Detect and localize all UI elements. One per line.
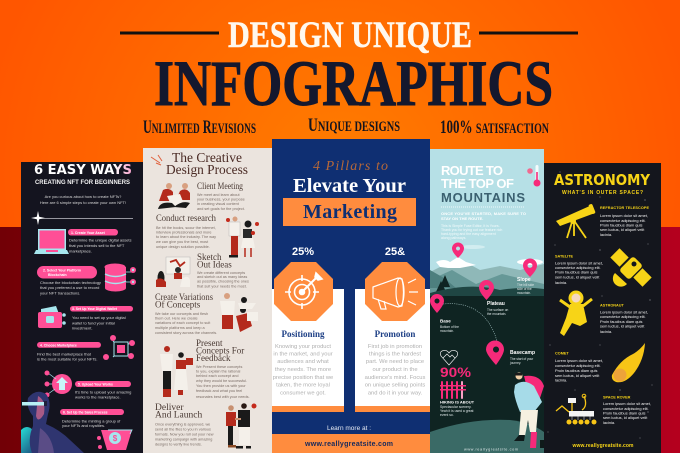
item: comet: sem luctus, id aliquet velit	[555, 373, 600, 378]
subheading and text: ONCE YOU'VE STARTED, MAKE SURE TO	[441, 211, 526, 216]
subheading and text	[441, 207, 526, 240]
step 3: wallet to fund your initial	[72, 320, 115, 326]
icon: telescope	[556, 204, 596, 238]
step 2: that you preferred a use to record	[40, 285, 99, 290]
icon: space rover	[556, 394, 596, 424]
step 6: your NFTs and royalties.	[62, 423, 105, 428]
step: client meeting: and set goals for the project.	[197, 207, 245, 211]
icon: network cube	[103, 335, 135, 360]
intro text	[40, 194, 126, 205]
step: create variations: Of Concepts	[155, 300, 201, 310]
icon: satellite	[610, 248, 652, 287]
item: comet	[555, 352, 603, 382]
decorative stars	[548, 172, 652, 438]
card: promotion: part. We need to place	[366, 359, 424, 365]
item: astronaut: sem luctus, id aliquet velit	[600, 324, 645, 328]
item: astronaut: Proin faucibus diam quis	[600, 319, 642, 324]
icon: astronaut	[560, 290, 592, 336]
icon: laptop	[34, 229, 69, 254]
step 4	[37, 342, 101, 362]
item: astronaut: consectetur adipiscing elit.	[600, 314, 646, 319]
step 3: You need to set up your digital	[72, 315, 126, 320]
card: positioning: in the market, and your	[273, 352, 333, 358]
illustration: two people meeting	[158, 183, 190, 209]
card: promotion	[355, 246, 430, 412]
subheading and text: Thank you for trying out our feature rich	[441, 228, 502, 232]
step: create variations	[155, 292, 217, 335]
heading: astronomy: ASTRONOMY	[554, 171, 651, 189]
card: positioning: Positioning	[281, 329, 325, 339]
icon: heart mountain	[440, 350, 458, 365]
pin: slope	[523, 258, 537, 277]
item: comet: Lorem ipsum dolor sit amet,	[555, 358, 603, 363]
step 1: 1. Create Your Asset	[71, 231, 106, 235]
label: slope: Slope	[517, 277, 531, 283]
footer website: www.reallygreatsite.com	[464, 448, 518, 452]
step: deliver and launch: send all the files to you in various	[155, 428, 211, 432]
step: deliver and launch: formats. Now you roll out your new	[155, 432, 214, 436]
item: space rover: sem luctus, id aliquet velit	[603, 415, 648, 420]
heading: Elevate Your: Elevate Your	[293, 175, 406, 197]
pin: base	[430, 294, 444, 313]
label: slope: The hill side	[517, 283, 534, 287]
item: comet: consectetur adipiscing elit.	[555, 363, 601, 368]
heading: route to the top of mountains	[441, 163, 525, 205]
step: sketch out ideas: and sketch out as many ideas	[197, 275, 247, 279]
text: hiking is about: event so.	[440, 413, 454, 417]
card: promotion: our product in the	[372, 367, 418, 373]
label: plateau: The surface on	[487, 308, 508, 312]
stat: 90 percent: 90%	[440, 365, 471, 380]
step: create variations: Create Variations	[155, 292, 213, 302]
step: client meeting: in creating visual content	[197, 202, 240, 206]
step: client meeting: We meet and learn about	[197, 193, 241, 197]
step 2: 2. Select Your Platform	[43, 268, 81, 272]
panel title	[166, 151, 248, 178]
background: orange upper band	[0, 0, 680, 227]
step: present concepts: to you, explain the rational	[196, 370, 240, 374]
label: slope: side of the	[517, 287, 532, 291]
item: satelite: SATELITE	[555, 254, 574, 258]
step 2: your NFT transactions.	[40, 290, 80, 296]
label: plateau: Plateau	[487, 301, 505, 307]
card: promotion: and do it in your way.	[368, 390, 423, 396]
item: satelite: lacinia.	[555, 280, 567, 285]
step 6: 6. Set Up the Sales Process	[63, 410, 108, 414]
item: satelite: sem luctus, id aliquet velit	[555, 274, 600, 280]
item: space rover	[603, 396, 651, 425]
step: present concepts	[196, 338, 250, 399]
illustration: two people presenting	[160, 346, 193, 397]
item: refractor telescope: REFRACTOR TELESCOPE	[600, 206, 649, 210]
item: space rover: Proin faucibus diam quis	[603, 410, 645, 416]
card: positioning: they needs. The more	[275, 367, 331, 373]
icon: thermometer	[527, 165, 540, 186]
item: space rover: Lorem ipsum dolor sit amet,	[603, 401, 651, 406]
footer: website bar: www.reallygreatsite.com	[304, 441, 393, 448]
card: promotion: audience's mind. Focus	[365, 375, 425, 381]
dark lower field	[430, 296, 544, 453]
card: positioning: precise position that we	[273, 375, 333, 381]
step: sketch out ideas	[197, 252, 249, 288]
item: refractor telescope: consectetur adipiscing elit.	[600, 218, 646, 223]
footer website: www.reallygreatsite.com	[572, 443, 634, 449]
pin: summit	[452, 242, 464, 258]
icon: megaphone	[373, 278, 418, 309]
step: conduct research: we can give you the best, most	[156, 240, 209, 244]
background: dark red lower band	[0, 227, 680, 453]
step 1	[68, 229, 131, 254]
item: satelite	[555, 254, 603, 285]
step: create variations: them out. Here we create	[155, 316, 198, 320]
item: refractor telescope: Proin faucibus diam quis	[600, 222, 642, 228]
pin: plateau	[479, 280, 494, 300]
illustration: hiker	[514, 372, 544, 448]
subheading and text: along pathways.	[441, 236, 466, 240]
step 3: investment.	[72, 326, 92, 330]
item: astronaut	[600, 304, 648, 334]
intro text: Here are 6 simple steps to create your own NFT!	[40, 200, 126, 205]
item: comet: COMET	[555, 352, 569, 356]
step: conduct research: interview professionals and more	[156, 230, 212, 234]
step 1: that you intends sell to the NFT	[69, 243, 125, 248]
card: promotion: things is the hardest	[369, 352, 421, 358]
step: conduct research: Be hit the books, scour the internet,	[156, 226, 216, 230]
item: astronaut: Lorem ipsum dolor sit amet,	[600, 310, 648, 314]
step: deliver and launch: Deliver	[155, 403, 184, 413]
heading: route to the top of mountains: MOUNTAINS	[441, 190, 525, 205]
label: basecamp: journey.	[509, 361, 521, 365]
banner: Marketing: Marketing	[303, 201, 397, 223]
step 6	[60, 409, 124, 428]
icon: money screen	[97, 430, 132, 450]
step 3	[70, 306, 133, 330]
step 5: It's time to upload your amazing	[75, 390, 131, 394]
text: hiking is about: Spectacular scenery.	[440, 405, 471, 409]
item: satelite: Proin faucibus diam quis	[555, 270, 597, 274]
card: positioning	[272, 246, 344, 412]
item: refractor telescope: sem luctus, id aliquet velit	[600, 227, 645, 232]
item: comet: Proin faucibus diam quis	[555, 368, 597, 373]
ground hill	[430, 420, 544, 453]
footer: website bar	[272, 434, 430, 453]
item: refractor telescope	[600, 206, 649, 237]
step 3: 3. Set Up Your Digital Wallet	[72, 307, 118, 311]
label: basecamp	[509, 350, 535, 365]
panel: creative design process	[143, 148, 272, 453]
step: deliver and launch: designs to verify live trends.	[155, 442, 202, 446]
step: present concepts: We Present these concepts	[196, 365, 242, 369]
card: promotion: First job in promotion	[368, 344, 422, 350]
panel title: Design Process	[166, 163, 248, 178]
card: promotion: 25&	[385, 246, 405, 258]
step 5: 5. Upload Your Works	[78, 382, 113, 386]
step: present concepts: Feedback	[196, 353, 231, 363]
panel: 6 easy ways NFT	[21, 162, 145, 453]
item: space rover: lacinia.	[603, 420, 615, 425]
step: deliver and launch: marketing campaign with amazing	[155, 438, 212, 442]
item: space rover: SPACE ROVER	[603, 396, 631, 400]
step: create variations: We take our concepts and flesh	[155, 312, 208, 316]
step: deliver and launch: And Launch	[155, 410, 202, 420]
footer: learn more: Learn more at :	[327, 425, 371, 432]
panel: four pillars marketing	[272, 139, 430, 453]
step 5	[75, 381, 131, 400]
step: client meeting: your business, your purpose	[197, 198, 245, 202]
step: sketch out ideas: as possible, choosing the ones	[197, 280, 249, 284]
item: satelite: Lorem ipsum dolor sit amet,	[555, 260, 603, 266]
step 2: Choose the blockchain technology	[40, 280, 101, 285]
icon: wallet	[38, 306, 66, 328]
icon: money screen: $	[113, 434, 118, 443]
heading: route to the top of mountains: ROUTE TO	[441, 163, 503, 178]
heading: Infographics: INFOGRAPHICS	[154, 48, 553, 120]
item: space rover: consectetur adipiscing elit.	[603, 406, 649, 411]
step: create variations: variations of each concept to suit	[155, 321, 211, 325]
step 6: Determine the minting a group of	[62, 418, 121, 424]
feature label: 100% satisfaction: 100% SATISFACTION	[440, 117, 549, 138]
divider with sparkle	[31, 211, 133, 225]
step: present concepts: You then provide us with your	[196, 384, 246, 388]
step: present concepts: resonates best with your needs.	[196, 395, 250, 399]
panel: route to the top of mountains	[430, 149, 544, 453]
illustration: team with laptop	[220, 293, 258, 332]
card: positioning: consumer we got.	[280, 390, 326, 396]
step: client meeting: Client Meeting	[197, 181, 243, 191]
label: plateau	[487, 301, 508, 316]
heading: Design Unique with side rules: DESIGN UNIQUE	[228, 15, 472, 56]
pin: basecamp	[486, 340, 504, 365]
route: dashed path	[443, 304, 497, 341]
subheading and text: This is Simple Fuse Editor, It is Yours.	[441, 224, 500, 228]
item: refractor telescope: lacinia.	[600, 232, 612, 237]
panel title: The Creative	[172, 151, 242, 166]
step: conduct research: Conduct research	[156, 213, 216, 223]
label: base: mountain.	[440, 329, 454, 333]
label: basecamp: The start of your	[510, 357, 534, 361]
card: promotion: on unique selling points	[365, 382, 425, 388]
card: positioning: taken, the more loyal	[276, 382, 330, 388]
illustration: two standing people	[226, 216, 259, 258]
subheading and text: hard-typing and the easy alignment	[441, 232, 496, 236]
step: present concepts: why they would be successful.	[196, 379, 247, 383]
icon: upload	[44, 370, 72, 398]
step: deliver and launch: Once everything is approved, we	[155, 422, 210, 426]
step: create variations: consistent story across the channels.	[155, 331, 217, 335]
step: present concepts: Concepts For	[196, 346, 244, 356]
card: positioning: audiences and what	[277, 359, 329, 365]
step 1: Determine the unique digital assets	[69, 238, 131, 242]
icon: accent rays	[151, 155, 162, 165]
step: deliver and launch	[155, 403, 214, 446]
step: conduct research: unique design solution possible.	[156, 245, 210, 249]
label: basecamp: Basecamp	[510, 350, 535, 356]
text: hiking is about: Yeah it is used a great	[440, 409, 473, 413]
step: sketch out ideas: Out Ideas	[197, 260, 232, 270]
step 4: Find the best marketplace that	[37, 352, 92, 356]
label: base: Bottom of the	[440, 325, 459, 329]
card: promotion: Promotion	[375, 329, 415, 339]
label: plateau: the mountain.	[487, 312, 506, 316]
illustration: mountain landscape	[430, 245, 544, 305]
illustration: handshake	[226, 403, 256, 448]
item: refractor telescope: Lorem ipsum dolor sit amet,	[600, 213, 648, 218]
subheading and text: STAY ON THE ROUTE.	[441, 216, 483, 221]
step: sketch out ideas: that suit your needs the most.	[197, 284, 247, 288]
icon: target	[285, 273, 322, 309]
step 4: 4. Choose Marketplace	[40, 343, 77, 347]
step 1: marketplace.	[69, 248, 92, 254]
heading: route to the top of mountains: THE TOP OF	[441, 176, 514, 191]
icon: database	[104, 264, 136, 292]
feature label: Unique designs: UNIQUE DESIGNS	[308, 115, 400, 136]
label: slope: mountain.	[517, 291, 531, 295]
step: conduct research	[156, 213, 216, 249]
step 2	[37, 266, 101, 296]
pictogram: people	[440, 381, 466, 399]
label: base: Base	[440, 318, 451, 324]
step: client meeting	[197, 181, 245, 211]
item: satelite: consectetur adipiscing elit.	[555, 265, 601, 270]
heading: Design Unique with side rules	[120, 15, 578, 56]
banner: Marketing	[283, 198, 416, 226]
feature label: Unlimited Revisions: UNLIMITED REVISIONS	[143, 117, 256, 138]
step 2: Blockchain	[48, 273, 67, 277]
panel subheading: CREATING NFT FOR BEGINNERS	[35, 179, 131, 186]
text: hiking is about	[440, 400, 475, 417]
illustration: cyber figure	[21, 392, 84, 453]
script heading: 4 Pillars to: 4 Pillars to	[313, 159, 388, 174]
step: present concepts: Present	[196, 338, 223, 348]
label: base	[440, 318, 459, 333]
step: conduct research: to learn about the industry. The way	[156, 235, 216, 239]
step: present concepts: behind each concept and	[196, 374, 238, 378]
card: positioning: 25%	[292, 246, 314, 258]
icon: comet	[612, 343, 645, 382]
step: create variations: multiple platforms and keep a	[155, 326, 205, 330]
label: slope	[517, 277, 534, 295]
item: astronaut: lacinia.	[600, 329, 612, 334]
step 4: is the most suitable for your NFTs.	[37, 356, 97, 362]
step 5: works to the marketplace.	[75, 394, 121, 400]
illustration: presenting board	[156, 257, 190, 287]
text: hiking is about: HIKING IS ABOUT	[440, 400, 475, 404]
intro text: Are you curious about how to create NFTs?	[45, 194, 122, 199]
card: positioning: Knowing your product	[275, 344, 331, 350]
step: present concepts: feedback and what you feel	[196, 389, 242, 393]
subheading: WHAT'S IN OUTER SPACE?	[562, 190, 643, 196]
panel: astronomy	[544, 163, 661, 453]
item: comet: lacinia.	[555, 378, 567, 382]
step: sketch out ideas: We create different concepts	[197, 271, 245, 275]
panel heading: 6 easy ways: 6 EASY WAYS	[34, 163, 132, 178]
item: astronaut: ASTRONAUT	[600, 304, 625, 308]
step: sketch out ideas: Sketch	[197, 252, 222, 262]
